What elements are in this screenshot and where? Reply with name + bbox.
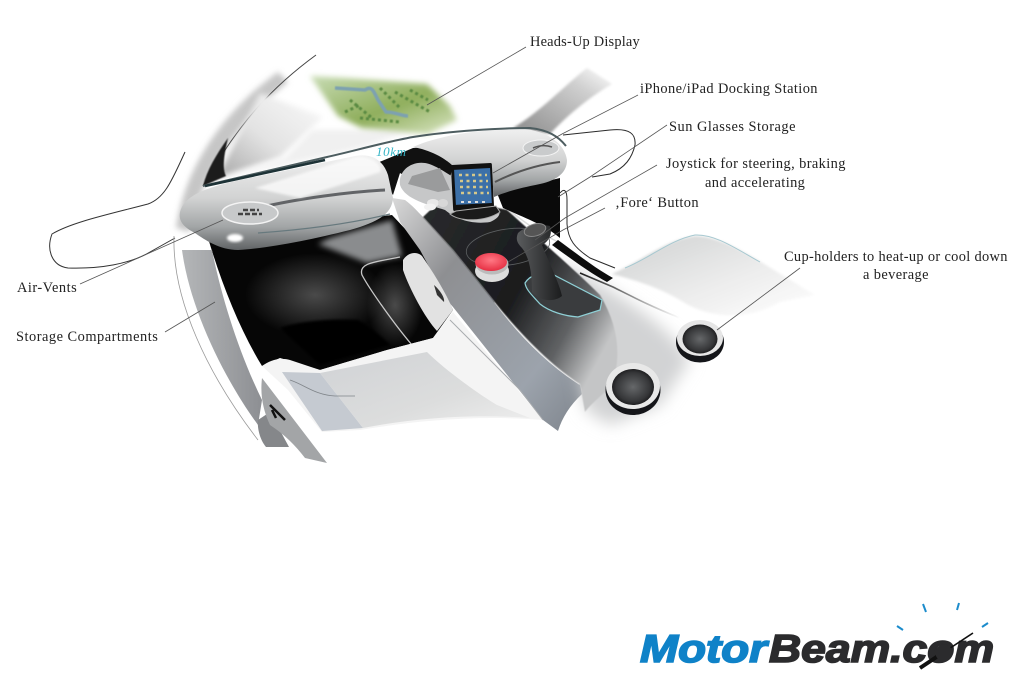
pedestal [400,163,500,223]
A-pillar swoosh [174,55,316,440]
soft grey shade right of console [560,260,690,425]
red Fore button [475,253,509,282]
black strip behind pedestal [377,147,453,200]
outline: right door sketch line [560,130,635,268]
grey shelf under the pod [318,220,402,263]
right dash pod [413,129,567,197]
windshield base dark wedge [203,138,228,186]
console trim light [507,208,560,243]
pillar bottom [258,412,289,447]
label: air-vents: Air-Vents [17,280,77,296]
leader: air-vents [80,220,223,284]
leader: joystick [535,165,657,240]
label: fore button: ‚Fore‘ Button [615,195,699,211]
label: joystick: Joystick for steering, braking [666,156,846,172]
dash top strip [203,128,566,186]
leader: cup-holders [717,268,800,330]
door panel [261,378,327,463]
logo: MotorBeam.com: Beam.com [769,628,994,671]
cup holder: front [606,363,660,415]
label: sun glasses storage: Sun Glasses Storage [669,119,796,135]
logo: MotorBeam.com: Motor [640,628,769,671]
leader: fore button [508,208,605,262]
leader: docking station [493,95,638,173]
leader: storage compartments [165,302,215,332]
black footwell and interior [208,215,453,370]
centre band [392,198,582,431]
right side wing panel [612,236,815,315]
storage bin edge [361,257,412,345]
console oval etching [464,223,552,271]
speed readout: 10km [376,144,407,159]
label: storage compartments: Storage Compartments [16,329,158,345]
joystick tray [525,273,602,317]
footwell highlights [245,253,423,365]
label: cup-holders: Cup-holders to heat-up or cool down [784,249,1008,265]
heads-up display map [310,76,457,134]
knee pad [403,253,453,331]
windshield surface [217,93,323,178]
leader: sun glasses [558,125,667,197]
black under right pod [497,178,560,238]
cup holder: rear [676,320,724,362]
logo: MotorBeam.com [640,603,994,671]
dark teal strip left [205,160,325,186]
iPad on dock [450,163,500,220]
seat panel [262,312,543,432]
label: joystick second line: and accelerating [705,175,805,191]
outline: left door sketch line [50,152,185,268]
label: cup-holders second line: a beverage [863,267,929,283]
left dash pod [180,155,393,250]
label: heads-up display: Heads-Up Display [530,34,641,50]
strut right [513,68,612,134]
windshield pale lower [225,128,420,178]
console trim trail [580,273,680,318]
label: docking station: iPhone/iPad Docking Station [640,81,818,97]
console black strip [552,240,613,282]
icon: gauge ticks [897,603,988,630]
leader: heads-up display [427,47,526,105]
icon: gauge needle [920,633,973,668]
console [423,196,617,412]
icon: air vent [222,202,278,224]
joystick [517,221,562,300]
left pillar band [182,250,262,425]
